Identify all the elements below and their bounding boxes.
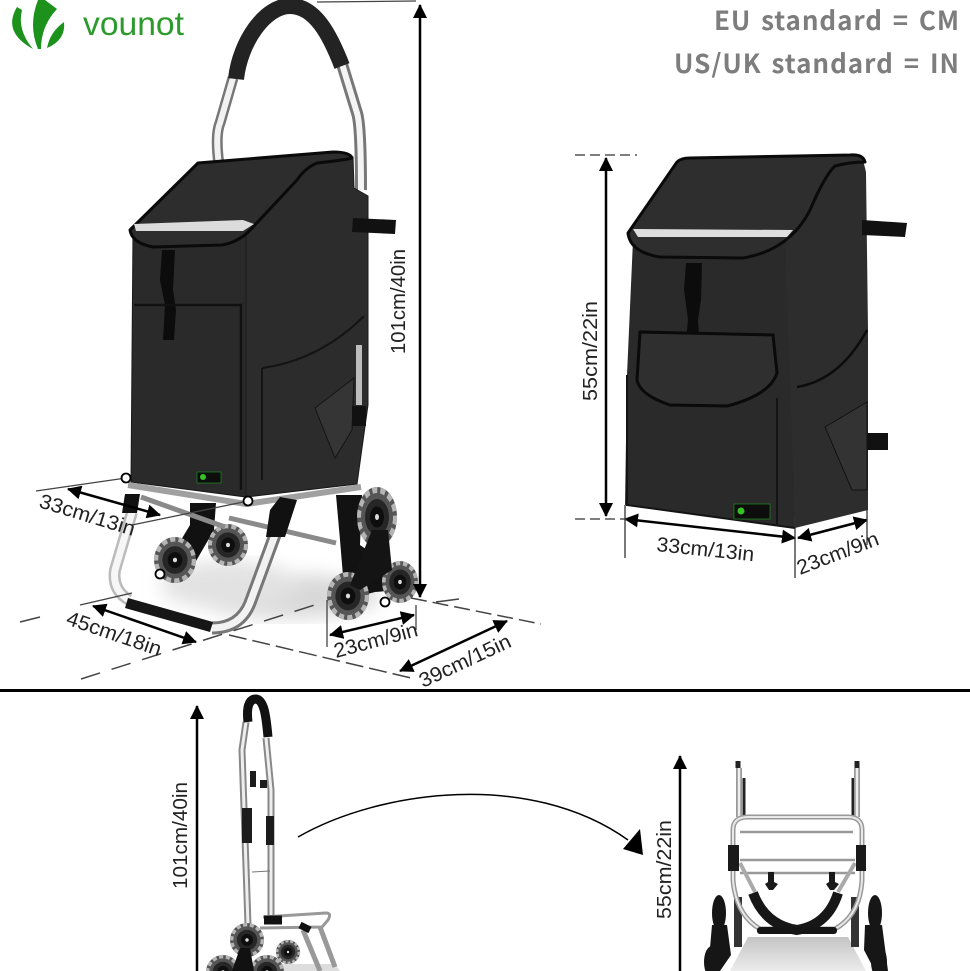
platform xyxy=(260,913,335,971)
uprights xyxy=(738,761,857,947)
floor shadow xyxy=(730,937,866,971)
floor shadow xyxy=(265,964,340,971)
dimension labels: main view: 23cm/9in xyxy=(331,618,420,663)
reflective strip xyxy=(134,220,254,231)
floor shadow xyxy=(160,561,380,618)
right foot tube xyxy=(212,535,275,628)
frame strip xyxy=(356,345,362,405)
dimension labels: main view: 39cm/15in xyxy=(415,630,515,693)
sleeves and latches xyxy=(242,771,274,845)
side straps xyxy=(352,218,396,234)
wheels xyxy=(276,940,300,964)
logo: vounot: vounot xyxy=(83,5,184,42)
pocket flap xyxy=(637,332,777,406)
front stair wheels xyxy=(327,487,418,620)
dimension labels: detached bag xyxy=(579,301,882,580)
trolley: main view xyxy=(115,6,418,632)
foot bar xyxy=(125,598,213,632)
joints xyxy=(728,845,739,871)
dimensions: main view xyxy=(20,1,541,679)
dimension labels: detached bag: 55cm/22in xyxy=(579,301,602,401)
handle grip xyxy=(247,699,268,737)
bag side xyxy=(785,156,868,528)
reflective strip xyxy=(633,229,793,237)
base frame xyxy=(128,485,361,504)
dimension labels: detached bag: 33cm/13in xyxy=(655,533,755,566)
standard legend xyxy=(674,1,959,81)
dimension labels: main view: 33cm/13in xyxy=(37,490,138,541)
dimensions: detached bag xyxy=(575,155,867,578)
side pocket xyxy=(262,316,364,480)
left foot tube xyxy=(115,512,132,600)
folded trolley: compact view xyxy=(704,761,888,971)
straps xyxy=(862,220,907,237)
dimension labels: main view xyxy=(37,249,515,693)
folded trolley: side view xyxy=(206,699,340,971)
standard legend: US/UK standard = IN xyxy=(674,44,959,81)
logo: vounot xyxy=(12,0,184,49)
standard legend: EU standard = CM xyxy=(714,1,959,38)
front pocket xyxy=(627,375,795,528)
dimension: folded height: 101cm/40in xyxy=(169,782,192,889)
bag: detached view xyxy=(625,155,907,528)
dimension labels: detached bag: 23cm/9in xyxy=(794,527,882,580)
green label xyxy=(197,472,221,483)
frame joints xyxy=(122,494,297,537)
buckle strap xyxy=(160,250,176,340)
side pocket xyxy=(797,330,867,387)
cross tubes xyxy=(141,497,336,543)
folding frame xyxy=(733,817,862,929)
front pocket xyxy=(134,305,241,490)
tubes xyxy=(242,722,271,925)
dimension: folded compact height: 55cm/22in xyxy=(653,820,676,919)
buckle strap xyxy=(684,263,702,350)
rear stair wheels xyxy=(154,503,248,583)
divider xyxy=(0,689,970,692)
dimension labels: main view: 101cm/40in xyxy=(387,249,410,354)
bag side xyxy=(246,157,368,497)
bag lid xyxy=(628,155,865,258)
green label xyxy=(734,504,770,519)
handle grip xyxy=(236,6,342,79)
right handle tube xyxy=(342,64,361,190)
arrow: fold transition xyxy=(298,794,643,855)
bag front xyxy=(131,225,246,497)
sling xyxy=(753,893,838,930)
latches xyxy=(765,872,839,890)
foot bar xyxy=(757,927,837,934)
bag front xyxy=(625,240,795,528)
bag lid xyxy=(130,152,352,247)
left handle tube xyxy=(217,78,233,165)
wheels xyxy=(704,895,888,971)
dimension labels: main view: 45cm/18in xyxy=(63,607,164,661)
